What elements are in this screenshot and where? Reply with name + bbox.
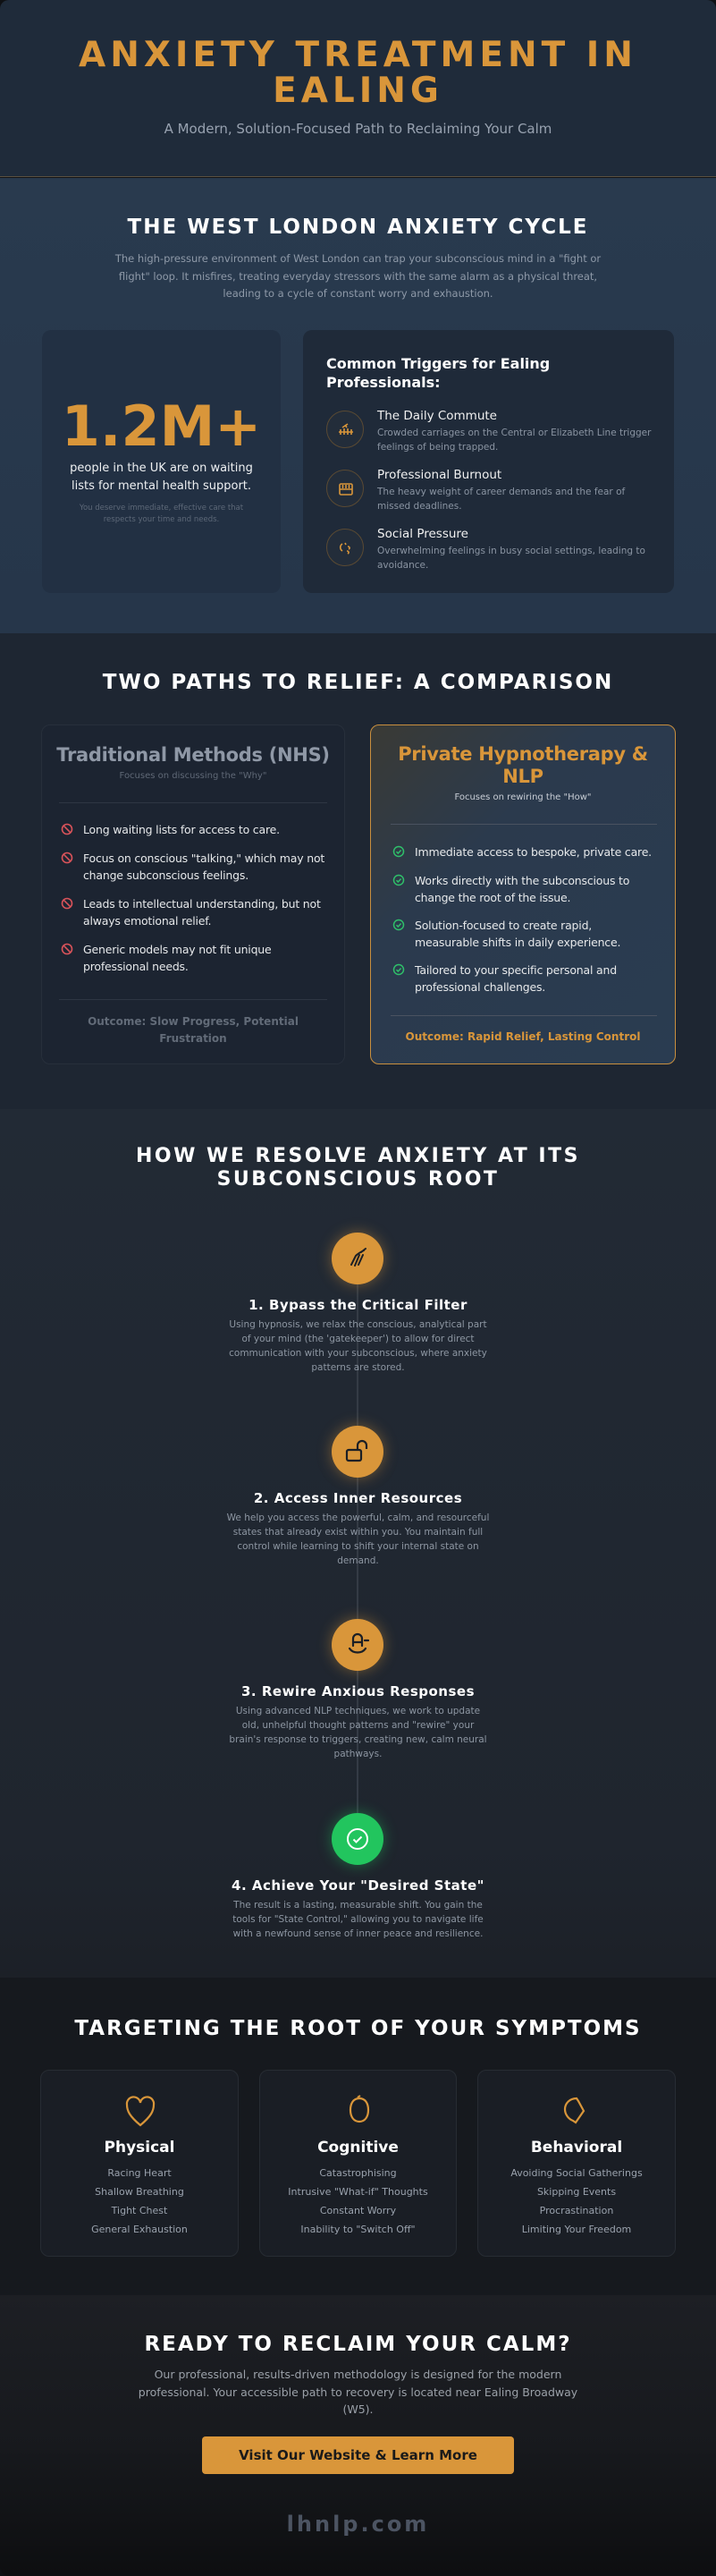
- icon: check: [332, 1813, 383, 1865]
- section: how we resolve: We help you access the powerful, calm, and resourceful states that already exist within you. You maintain full control while learning to shift your internal state on demand.: [227, 1513, 489, 1566]
- triggers card: Crowded carriages on the Central or Elizabeth Line trigger feelings of being trapped.: [377, 428, 651, 453]
- negatives list: Generic models may not fit unique professional needs.: [83, 943, 272, 973]
- intro paragraph: The high-pressure environment of West London can trap your subconscious mind in a "fight or flight" loop. It misfires, treating everyday stressors with the same alarm as a physical threat, leading to a cycle of constant worry and exhaustion.: [115, 252, 601, 300]
- symptom card: behavioral: Limiting Your Freedom: [522, 2224, 631, 2235]
- header section: [0, 0, 716, 177]
- section: west london anxiety cycle: [0, 178, 716, 633]
- heading: THE WEST LONDON ANXIETY CYCLE: [128, 216, 588, 239]
- step 1: [229, 1225, 487, 1373]
- triggers card: Professional Burnout: [377, 468, 501, 482]
- title: ANXIETY TREATMENT IN: [79, 35, 637, 75]
- title: Private Hypnotherapy &: [398, 743, 648, 765]
- symptom card: behavioral: Procrastination: [540, 2205, 613, 2216]
- triggers card: [303, 330, 674, 593]
- symptom card: cognitive: Inability to "Switch Off": [300, 2224, 416, 2235]
- title: Traditional Methods (NHS): [56, 744, 330, 766]
- triggers heading: Common Triggers for Ealing: [326, 355, 550, 372]
- benefits list: Works directly with the subconscious to change the root of the issue.: [415, 874, 629, 904]
- symptom card: cognitive: [259, 2070, 457, 2257]
- stat text: people in the UK are on waiting: [70, 462, 253, 475]
- icon: rewire: [332, 1619, 383, 1671]
- negatives list: Focus on conscious "talking," which may not change subconscious feelings.: [83, 852, 324, 882]
- section: call to action: [0, 2295, 716, 2576]
- triggers card: The heavy weight of career demands and the fear of missed deadlines.: [377, 487, 625, 512]
- section: how we resolve: Using hypnosis, we relax the conscious, analytical part of your mind (the 'gatekeeper') to allow for direct communication with your subconscious, where anxiety patterns are stored.: [229, 1319, 487, 1373]
- negatives list: Long waiting lists for access to care.: [83, 823, 280, 836]
- heading: HOW WE RESOLVE ANXIETY AT ITS: [136, 1145, 580, 1167]
- heading: SUBCONSCIOUS ROOT: [217, 1168, 499, 1191]
- trigger: social: [326, 527, 645, 571]
- symptom card: physical: Shallow Breathing: [95, 2186, 184, 2198]
- heading: READY TO RECLAIM YOUR CALM?: [144, 2333, 572, 2356]
- section: symptoms: [0, 1978, 716, 2295]
- symptom card: behavioral: Avoiding Social Gatherings: [510, 2167, 643, 2179]
- negatives list: Leads to intellectual understanding, but not always emotional relief.: [83, 897, 321, 928]
- section: how we resolve: The result is a lasting, measurable shift. You gain the tools for "State Control," allowing you to navigate life with a newfound sense of inner peace and resilience.: [232, 1900, 484, 1939]
- stat note: respects your time and needs.: [104, 515, 219, 524]
- stat note: You deserve immediate, effective care that: [80, 504, 243, 513]
- section: how we resolve: [0, 1109, 716, 1978]
- symptom card: cognitive: Constant Worry: [320, 2205, 396, 2216]
- stat note: [80, 504, 243, 524]
- benefits list: Solution-focused to create rapid, measurable shifts in daily experience.: [415, 919, 620, 949]
- benefits list: Tailored to your specific personal and professional challenges.: [415, 963, 617, 994]
- symptom card: behavioral: Behavioral: [531, 2139, 622, 2157]
- icon: heart: [125, 2096, 156, 2127]
- symptom card: physical: General Exhaustion: [91, 2224, 188, 2235]
- symptom card: cognitive: Intrusive "What-if" Thoughts: [288, 2186, 428, 2198]
- symptom card: physical: Racing Heart: [107, 2167, 172, 2179]
- button: Visit Our Website & Learn More: [239, 2447, 477, 2463]
- icon: calendar: [326, 470, 364, 507]
- step 4: [232, 1806, 484, 1939]
- triggers card: Overwhelming feelings in busy social settings, leading to avoidance.: [377, 546, 645, 571]
- benefits list: [393, 845, 652, 994]
- title: NLP: [502, 766, 543, 787]
- section: how we resolve: 1. Bypass the Critical Filter: [248, 1297, 468, 1313]
- heading: TARGETING THE ROOT OF YOUR SYMPTOMS: [74, 2017, 642, 2040]
- domain: lhnlp.com: [287, 2512, 429, 2537]
- icon: shield: [563, 2097, 585, 2123]
- icon: unlock: [332, 1426, 383, 1478]
- section: comparison: [0, 633, 716, 1109]
- title: EALING: [273, 71, 443, 111]
- symptom card: physical: Physical: [105, 2139, 174, 2157]
- step 3: [229, 1612, 487, 1759]
- outcome: Outcome: Rapid Relief, Lasting Control: [406, 1030, 640, 1043]
- outcome: Outcome: Slow Progress, Potential Frustration: [88, 1015, 299, 1045]
- stat text: [70, 462, 253, 493]
- icon: train: [326, 411, 364, 448]
- trigger: burnout: [326, 468, 626, 512]
- benefits list: Immediate access to bespoke, private care.: [415, 845, 652, 859]
- symptom card: physical: Tight Chest: [112, 2205, 167, 2216]
- subtitle: A Modern, Solution-Focused Path to Reclaiming Your Calm: [164, 121, 552, 137]
- trigger: commute: [326, 409, 651, 453]
- symptom card: cognitive: Catastrophising: [319, 2167, 397, 2179]
- button: [202, 2436, 514, 2474]
- icon: people: [326, 529, 364, 566]
- paragraph: Our professional, results-driven methodology is designed for the modern professional. Your accessible path to recovery is located near Ealing Broadway (W5).: [139, 2368, 577, 2416]
- section: how we resolve: 2. Access Inner Resources: [254, 1490, 462, 1506]
- title: [79, 35, 637, 111]
- section: how we resolve: 3. Rewire Anxious Responses: [241, 1683, 475, 1699]
- stat text: lists for mental health support.: [72, 479, 251, 493]
- section: how we resolve: 4. Achieve Your "Desired State": [232, 1877, 484, 1894]
- symptom card: cognitive: Cognitive: [317, 2139, 399, 2157]
- icon: brain: [349, 2095, 370, 2123]
- title: [398, 743, 648, 787]
- subtitle: Focuses on discussing the "Why": [120, 771, 266, 781]
- step 2: [227, 1419, 489, 1566]
- symptom card: behavioral: [477, 2070, 676, 2257]
- stat card: [42, 330, 281, 593]
- heading: TWO PATHS TO RELIEF: A COMPARISON: [103, 671, 613, 694]
- icon: hand: [332, 1233, 383, 1284]
- triggers card: The Daily Commute: [377, 409, 497, 423]
- triggers heading: [326, 355, 550, 391]
- triggers card: Social Pressure: [377, 527, 468, 541]
- stat number: 1.2M+: [62, 394, 261, 459]
- card: traditional: [41, 724, 345, 1064]
- symptom card: behavioral: Skipping Events: [537, 2186, 616, 2198]
- triggers heading: Professionals:: [326, 374, 441, 391]
- negatives list: [61, 823, 324, 973]
- section: how we resolve: Using advanced NLP techniques, we work to update old, unhelpful thought patterns and "rewire" your brain's response to triggers, creating new, calm neural pathways.: [229, 1706, 487, 1759]
- symptom card: physical: [40, 2070, 239, 2257]
- heading: [136, 1145, 580, 1191]
- subtitle: Focuses on rewiring the "How": [454, 792, 592, 802]
- card: private hypnotherapy: [370, 724, 676, 1064]
